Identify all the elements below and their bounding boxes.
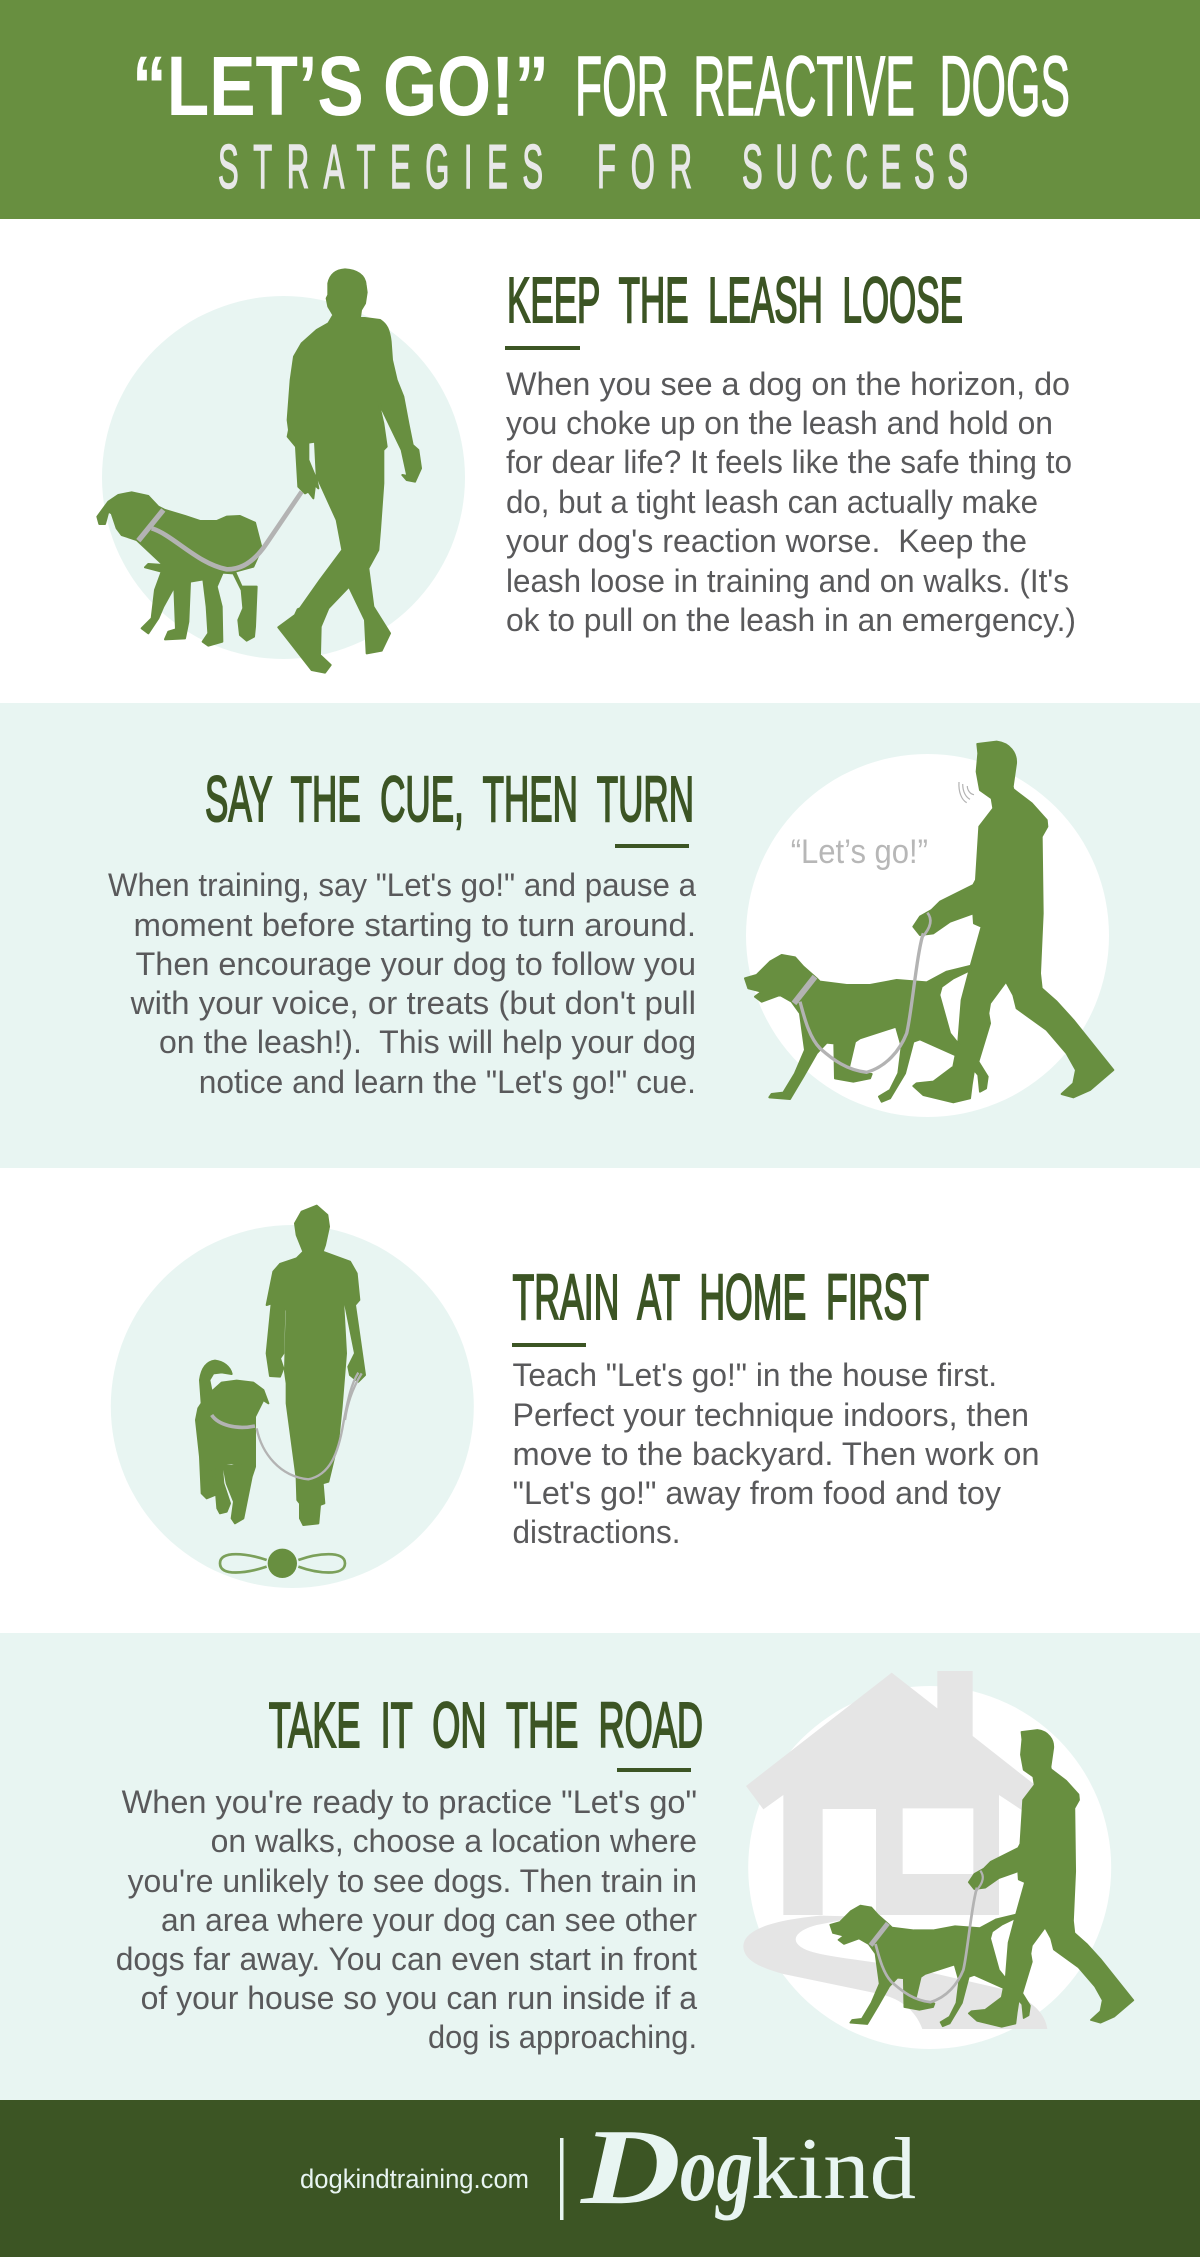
- body text: When training, say "Let's go!" and pause a: [108, 867, 696, 903]
- body text: an area where your dog can see other: [161, 1902, 697, 1938]
- body text: When you're ready to practice "Let's go": [122, 1784, 697, 1820]
- panel: train at home first: [0, 1168, 1200, 1633]
- body text: [116, 1784, 697, 2055]
- title: [132, 39, 1070, 133]
- heading rule: [617, 1768, 691, 1772]
- heading: SAY THE CUE, THEN TURN: [205, 763, 694, 835]
- background circle: [746, 754, 1109, 1117]
- silhouette: person: [267, 1206, 365, 1525]
- heading: TAKE IT ON THE ROAD: [269, 1689, 703, 1761]
- body text: [108, 867, 696, 1100]
- speech text: “Let’s go!”: [791, 833, 928, 871]
- subtitle: STRATEGIES: [218, 134, 543, 202]
- silhouette: person: [969, 1730, 1133, 2027]
- background circle: [111, 1225, 474, 1588]
- icon: house: [746, 1671, 1035, 1915]
- logo: Dogkind: kind: [751, 2121, 916, 2218]
- heading rule: [505, 346, 580, 350]
- silhouette: dog: [196, 1361, 268, 1523]
- silhouette: dog: [97, 492, 262, 646]
- silhouette: person: [913, 742, 1113, 1102]
- body text: for dear life? It feels like the safe thing to: [506, 444, 1072, 480]
- body text: distractions.: [512, 1514, 680, 1550]
- logo: Dogkind: [580, 2108, 916, 2227]
- illustration: person and dog in front of house: [743, 1671, 1133, 2049]
- silhouette: person: [278, 269, 421, 673]
- body text: [512, 1357, 1040, 1550]
- body text: ok to pull on the leash in an emergency.): [506, 602, 1076, 638]
- body text: leash loose in training and on walks. (It's: [506, 563, 1069, 599]
- icon: sound waves: [959, 782, 974, 803]
- body text: of your house so you can run inside if a: [141, 1980, 697, 2016]
- leash and collar: [138, 492, 302, 569]
- subtitle: [218, 134, 968, 202]
- body text: your dog's reaction worse. Keep the: [506, 523, 1027, 559]
- header banner: [0, 0, 1200, 219]
- body text: on walks, choose a location where: [211, 1823, 697, 1859]
- logo: Dogkind: D: [580, 2108, 681, 2227]
- body text: move to the backyard. Then work on: [512, 1436, 1040, 1472]
- silhouette: dog: [830, 1906, 1016, 2026]
- icon: ball toy: [220, 1549, 345, 1578]
- body text: [506, 366, 1076, 638]
- body text: you choke up on the leash and hold on: [506, 405, 1053, 441]
- silhouette: dog: [745, 955, 971, 1102]
- leash and collar: [212, 1373, 362, 1479]
- background circle: [748, 1686, 1111, 2049]
- background circle: [102, 296, 465, 659]
- body text: you're unlikely to see dogs. Then train in: [128, 1863, 697, 1899]
- body text: with your voice, or treats (but don't pull: [130, 985, 696, 1021]
- body text: moment before starting to turn around.: [134, 907, 696, 943]
- illustration: person and dog with toy: [111, 1206, 474, 1588]
- body text: notice and learn the "Let's go!" cue.: [199, 1064, 696, 1100]
- logo: Dogkind: og: [680, 2115, 753, 2221]
- body text: do, but a tight leash can actually make: [506, 484, 1038, 520]
- subtitle: FOR: [597, 134, 692, 202]
- heading rule: [615, 844, 689, 848]
- leash and collar: [871, 1871, 983, 2002]
- illustration: person saying the cue: [745, 742, 1113, 1117]
- body text: on the leash!). This will help your dog: [159, 1024, 696, 1060]
- title: “LET’S GO!”: [132, 39, 549, 133]
- leash and collar: [794, 913, 930, 1072]
- panel: say the cue, then turn: [0, 703, 1200, 1168]
- panel: keep the leash loose: [0, 219, 1200, 703]
- body text: dog is approaching.: [428, 2019, 697, 2055]
- footer: [0, 2100, 1200, 2257]
- heading rule: [512, 1343, 586, 1347]
- divider: [560, 2138, 564, 2220]
- subtitle: SUCCESS: [742, 134, 968, 202]
- body text: Perfect your technique indoors, then: [512, 1397, 1029, 1433]
- body text: dogs far away. You can even start in front: [116, 1941, 697, 1977]
- body text: Then encourage your dog to follow you: [136, 946, 696, 982]
- illustration: person walking dog on loose leash: [97, 269, 465, 673]
- panel: take it on the road: [0, 1633, 1200, 2100]
- body text: When you see a dog on the horizon, do: [506, 366, 1070, 402]
- website url: dogkindtraining.com: [300, 2164, 529, 2194]
- body text: Teach "Let's go!" in the house first.: [512, 1357, 997, 1393]
- body text: "Let's go!" away from food and toy: [512, 1475, 1001, 1511]
- icon: path to the house: [743, 1916, 1047, 2029]
